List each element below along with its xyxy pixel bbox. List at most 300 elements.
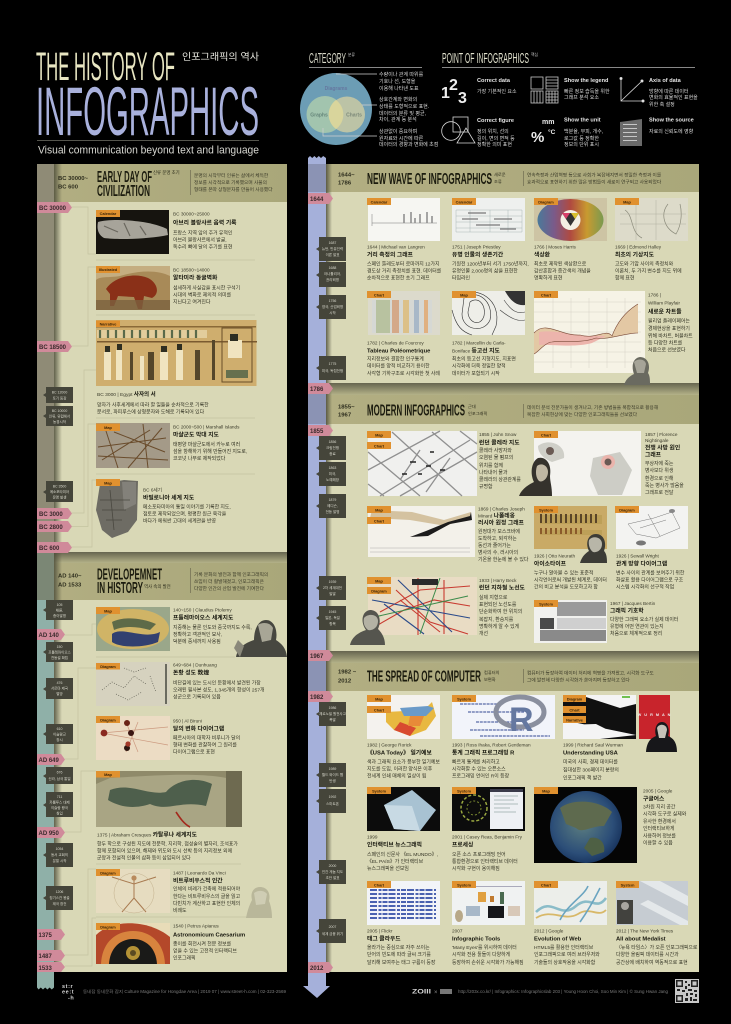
history notes: 676 — [57, 770, 62, 774]
image: john snow map: Map — [375, 432, 384, 438]
text: playfair: 새로운 차트들 — [648, 308, 682, 316]
title: THE HISTORY OF — [36, 45, 175, 89]
heading: early day of civilization — [58, 169, 273, 200]
text: all about medalist: 다양한 올림픽 데이터를 시간과 — [616, 951, 679, 958]
image: ptolemy world map — [96, 607, 170, 651]
text: all about medalist: 〈뉴욕 타임스〉가 오픈 인포그래픽으로 — [616, 944, 698, 951]
history notes: 1206 — [56, 890, 63, 894]
panel: point of infographics: 정의 위치, 선의 — [477, 128, 509, 135]
history notes: 인류, 유럽에서 — [49, 414, 70, 418]
history notes: 체르노빌 원전사고 — [319, 711, 347, 716]
text: flickr — [367, 928, 436, 966]
text: catalan atlas: 함께 포함되어 있으며, 해제와 위도와 도시 선박 등의 지리정보 외에 — [97, 848, 232, 854]
text: babylonian map: 바빌로니아 세계 지도 — [143, 494, 195, 502]
image: usa today weather — [367, 695, 440, 739]
text: playfair: 처음으로 선보였다 — [648, 346, 686, 354]
history notes: 에디슨, — [327, 503, 338, 508]
history notes — [316, 237, 347, 943]
panel: point of infographics: 백분율, 부피, 개수, — [564, 128, 603, 135]
icon: units: % — [531, 129, 544, 146]
text: flickr: 2005 | Flickr — [367, 928, 393, 934]
text: john snow: 나타내어 물과 — [479, 469, 508, 476]
image: calendar bone: Calendar — [100, 211, 117, 216]
image: bison cave painting — [96, 266, 170, 310]
heading: modern infographics: 복잡한 사회현상에 맞는 다양한 인포그래픽들을 선보였다 — [527, 411, 638, 418]
text: marshall islands — [173, 424, 247, 462]
text: google earth: 인터랙티브하게 — [643, 825, 674, 832]
text: dunhuang: 성군으로 기록되어 있음 — [173, 694, 221, 700]
history notes: 토기 등장 — [53, 396, 67, 400]
text: google earth: 유사한 환경에서 — [643, 818, 676, 825]
image: john snow map: Chart — [374, 444, 385, 448]
text: harry beck — [479, 578, 526, 637]
image: wright diagram — [615, 506, 688, 549]
image: minard map — [367, 506, 475, 557]
image: halley map — [615, 198, 688, 241]
icon: legend grids — [531, 77, 558, 103]
text: catalan atlas: 군왕과 전설적 인물의 삽화 등이 삽입되어 있다 — [97, 854, 191, 862]
text: calendar bone: 아브리 블랑샤르에서 발굴, — [173, 236, 227, 244]
panel: point of infographics: 길이, 면의 면적 등 — [477, 135, 515, 142]
text: bertin: 유형에 어떤 연관이 있는지 — [610, 623, 664, 630]
history notes: 초안 발표 — [326, 875, 340, 880]
text: nightingale: 그래프 — [645, 450, 662, 458]
text: all about medalist: 공간상에 배치하여 역동적으로 표현 — [616, 959, 688, 966]
history notes: 2007 — [329, 925, 336, 929]
text: langren — [367, 244, 442, 282]
image: infographic tools: System — [457, 882, 471, 888]
text: halley: 고도와 기압 사이의 측정치와 — [615, 260, 674, 268]
text: wright — [616, 554, 685, 590]
history notes: 메소포타미아 — [50, 489, 70, 494]
text: dunhuang: 649~684 | Dunhuang — [173, 662, 217, 668]
heading: the spread of computer: 2012 — [338, 678, 352, 684]
text: dunhuang — [173, 662, 265, 700]
history notes: 1879 — [329, 498, 336, 502]
history notes: 711 — [57, 795, 62, 799]
history notes: 미국, 독립전쟁 — [322, 368, 343, 373]
text: minard: 1869 | Charles Joseph — [478, 506, 525, 512]
history notes: 일본, 독일 — [325, 615, 340, 620]
panel: point of infographics: POINT OF INFOGRAPHICS — [442, 50, 529, 67]
text: nightingale: 환경으로 인해 — [645, 475, 673, 482]
text: john snow — [479, 432, 521, 490]
text: ptolemy: 지중해는 물론 인도와 중국까지도 수록, — [173, 624, 252, 631]
timeline flags — [308, 193, 333, 973]
text: vitruvian: 한다는 비트루비우스의 글을 읽고 — [173, 893, 241, 900]
text: playfair: William Playfair — [648, 300, 680, 306]
panel: point of infographics: 자료의 신뢰도에 영향 — [649, 128, 694, 135]
image: astronomicum caesarium: Diagram — [100, 924, 116, 930]
history notes: 크림전쟁 — [326, 445, 339, 450]
text: calendar bone: BC 30000~25000 — [173, 212, 210, 216]
title — [36, 45, 259, 156]
heading: modern infographics: 데이터 분석 전문가들이 생겨나고, 기존 방법들을 복합적으로 활용해 — [527, 404, 658, 411]
timeline flags: AD 950 — [38, 831, 60, 837]
icon: nightingale portrait — [519, 458, 552, 496]
history notes: 신라, 삼국 통일 — [48, 776, 71, 781]
text: fourcroy: 지리정보와 결합한 인구통계 — [367, 356, 424, 362]
panel: point of infographics: Show the unit — [564, 118, 601, 124]
timeline flags: BC 30000 — [39, 206, 67, 212]
text: harry beck: 개선 — [479, 630, 488, 637]
text: interactive news: 인터랙티브 뉴스그래픽 — [367, 840, 422, 848]
panel: point of infographics: 방향에 따른 데이터 — [649, 88, 689, 95]
text: halley: 함께 표현 — [615, 274, 634, 282]
panel: point of infographics: 가장 기본적인 요소 — [477, 88, 517, 95]
text: priestley: 1751 | Joseph Priestley — [452, 244, 501, 250]
history notes: 종이발명 — [53, 613, 66, 618]
text: egypt: 망자가 사후세계에서 따라 할 일들을 순차적으로 기록한 — [97, 402, 209, 408]
image: vitruvian man — [96, 869, 170, 913]
text: astronomicum: 인포그래픽 — [173, 954, 196, 962]
text: minard: 원정대가 모스크바에 — [478, 528, 520, 535]
icon: leonardo portrait — [246, 887, 272, 918]
image: astronomicum caesarium — [96, 923, 170, 964]
text: contour — [452, 340, 516, 377]
logo: street-h: ee:t — [62, 990, 74, 996]
heading: development in history: AD 1533 — [58, 582, 82, 588]
icon: units: mm — [542, 119, 554, 126]
image: minard map: Chart — [374, 518, 385, 524]
panel: category: 상태를 도형적으로 표현. — [379, 103, 429, 110]
image: calendar bone — [96, 210, 169, 254]
text: INFOGRAPHICS — [36, 73, 259, 150]
text: interactive news: 《EL PAÍS》가 인터랙티브 — [367, 858, 424, 865]
timeline flags: 1375 — [38, 933, 53, 939]
text: harry beck: 명확하게 알 수 있게 — [479, 623, 519, 630]
text: minard — [478, 506, 529, 563]
timeline flags: AD 140 — [38, 633, 60, 639]
icon: figures — [442, 117, 475, 143]
text: google earth: 사용하여 정보를 — [643, 832, 676, 840]
heading: new wave of infographics: 새로운 — [494, 171, 506, 178]
image: infographic tools — [452, 881, 525, 925]
history notes: 시작 — [329, 310, 336, 315]
text: nightingale: Nightingale — [645, 438, 669, 443]
text: infographic tools: 2007 — [452, 928, 463, 934]
text: evolution of web: 기술들의 상호작용을 시각화함 — [534, 959, 596, 966]
panel: category: 분류 — [348, 52, 355, 57]
heading: development in history: IN HISTORY — [97, 580, 143, 597]
text: flickr: 단어의 빈도에 따라 글씨 크기를 — [367, 951, 431, 958]
text: google earth: 3차원 지리 공간 — [643, 804, 676, 810]
heading: new wave of infographics: 조류 — [494, 179, 502, 185]
image: isotype — [534, 506, 607, 549]
text: john snow: 1855 | John Snow — [479, 432, 517, 437]
text: calendar bone: 프랑스 지역 앞의 주거 유적인 — [173, 230, 232, 236]
text: neurath: 1926 | Otto Neurath — [534, 554, 575, 558]
heading: development in history: 다양한 인간의 산업 발전에 기여한다 — [194, 585, 265, 592]
image: london underground map: Diagram — [371, 588, 387, 594]
heading: new wave of infographics: 연속측정과 산업혁명 등으로 사회가 복잡해지면서 정밀한 측정과 이를 — [527, 172, 662, 178]
timeline flags: 1533 — [38, 966, 53, 972]
text: egypt: 문서로, 파피루스에 상형문자와 도해로 기록되어 있다 — [97, 408, 205, 416]
text: fourcroy: 데이터를 양적 비교하기 용이한 — [367, 362, 430, 370]
history notes: 권리혁명 — [326, 277, 339, 282]
text: nightingale: 죽는 병사가 많음을 — [645, 482, 684, 489]
text: contour: 1782 | Marcellin du Carla- — [452, 340, 506, 346]
image: nightingale rose: Chart — [541, 432, 552, 438]
image: google earth — [534, 787, 637, 863]
text: al biruni: 형태 변화를 관찰하여 그 원리를 — [173, 742, 237, 748]
heading: new wave of infographics: 효과적으로 표현하기 위한 많은 방법들이 새로이 연구되고 사용되었다 — [527, 178, 662, 186]
text: infographic tools: 'Many Eyes'를 위시하여 데이터 — [452, 944, 517, 951]
history notes: 1945 — [329, 610, 336, 614]
text: marshall islands: 섬을 항해하기 위해 만들어진 지도로, — [173, 448, 247, 455]
text: babylonian map — [143, 486, 231, 524]
image: r language: System — [457, 696, 471, 702]
panel: category: 원자료와 시간에 따른 — [379, 135, 424, 142]
heading: development in history: DEVELOPEMNET — [97, 566, 162, 584]
text: interactive news: 1999 — [367, 834, 378, 840]
text: harry beck: 단순화하여 한 위치의 — [479, 608, 522, 615]
image: london underground map: Map — [375, 578, 384, 584]
timeline flags: 1487 — [38, 954, 53, 960]
panel background — [326, 164, 699, 972]
image: interactive news graphic: System — [372, 788, 386, 794]
panel: point of infographics: 위한 축 설정 — [649, 101, 675, 108]
history notes: 서로마 제국 — [51, 686, 69, 690]
panel: category: 기호나 선, 도형을 — [379, 78, 416, 85]
text: john snow: 위치를 함께 — [479, 462, 503, 469]
text: processing: 통합환경으로 인터랙티브 데이터 — [452, 858, 518, 865]
text: priestley: 유명 인물의 생존기간 — [452, 250, 504, 258]
text: ptolemy: 프톨레마이오스 세계지도 — [173, 614, 234, 622]
text: wurman: Understanding USA — [563, 750, 619, 756]
icon: ptolemy portrait — [234, 620, 287, 657]
image: google earth: Map — [542, 788, 551, 794]
text: al biruni: 달의 변화 다이어그램 — [173, 724, 224, 732]
history notes: 창시 — [56, 737, 63, 742]
timeline arrow — [303, 156, 330, 998]
text: wright: 관계 방향 다이어그램 — [616, 560, 667, 568]
history notes: BC 12000 — [52, 390, 67, 394]
text: r language: 프로그래밍 언어인 R이 등장 — [452, 772, 510, 780]
text: bison cave painting: 시대의 벽화로 제의적 의미를 — [173, 292, 232, 298]
icon: units — [531, 119, 556, 146]
text: harry beck: 1933 | Harry Beck — [479, 578, 517, 583]
qr code — [675, 979, 699, 1003]
text: all about medalist — [616, 928, 698, 966]
text: marshall islands: 태평양 마샬군도에서 카누로 여러 — [173, 441, 240, 448]
text: langren: 스페인 톨레도부터 로마까지 12가지 — [367, 260, 440, 268]
image: evolution of web — [534, 881, 607, 925]
text: halley: 최초의 기상지도 — [615, 250, 655, 258]
text: neurath: 누구나 알아볼 수 있는 표준적 — [534, 570, 593, 576]
text: al biruni: 페르시아의 대학자 비루니가 달의 — [173, 734, 240, 742]
image: catalan atlas: Map — [104, 772, 113, 777]
image: nightingale rose — [534, 431, 641, 496]
heading: new wave of infographics: NEW WAVE OF INFOGRAPHICS — [367, 171, 492, 188]
text: usa today: 1982 | George Rorick — [367, 742, 412, 748]
text: bertin: 그래픽 기호학 — [610, 606, 644, 614]
heading: early day of civilization: EARLY DAY OF — [97, 169, 152, 186]
panel: point of infographics: 변화의 효율적인 표현을 — [649, 94, 698, 101]
text: neurath: 아이소타이프 — [534, 560, 567, 568]
text: flickr: 태그 클라우드 — [367, 934, 401, 942]
text: minard: 도착하고, 퇴각하는 — [478, 535, 517, 542]
text: contour: 데이터가 포함되기 시작 — [452, 370, 500, 377]
panel: point of infographics: Correct figure — [477, 118, 514, 124]
text: john snow: 콜레라 사망자와 — [479, 447, 512, 454]
timeline flags: AD 649 — [38, 758, 60, 764]
image: book of the dead papyrus: Narrative — [100, 322, 117, 326]
text: infographic tools: 시각화 전용 툴들이 다양하게 — [452, 951, 510, 958]
text: all about medalist: 2012 | The New York Times — [616, 928, 674, 934]
text: processing — [452, 834, 523, 872]
text: r language: 통계 그래픽 프로그래밍 R — [452, 748, 515, 756]
text: catalan atlas: 1375 | Abraham Cresques 카탈루냐 세계지도 — [97, 830, 198, 838]
image: bertin semiology — [534, 600, 607, 643]
text: halley — [615, 244, 682, 282]
text: usa today: 《USA Today》 일기예보 — [367, 748, 432, 756]
icon: numbers 123: 1 — [441, 85, 450, 102]
text: ptolemy: 140~150 | Claudius Ptolemy — [173, 608, 232, 612]
text: google earth: 2005 | Google — [643, 788, 673, 794]
text: wurman: 미국의 사회, 경제 데이터를 — [563, 758, 618, 766]
image: fourcroy tableau — [367, 291, 440, 335]
history notes: 노예해방 — [326, 477, 340, 482]
venn diagram: Graphs — [310, 112, 328, 118]
text: usa today: 색과 그래픽 요소가 풍부한 일기예보 — [367, 758, 440, 766]
image: priestley chart: Calendar — [456, 200, 473, 204]
panel: right column — [303, 156, 699, 998]
text: vitruvian: 다빈치가 계산하고 표현한 인체의 — [173, 900, 240, 907]
text: playfair: 1786 | — [648, 292, 661, 298]
text: harris: 명확하게 표현 — [534, 274, 562, 282]
text: dunhuang: 비단길에 있는 도시인 둔황에서 발견된 가장 — [173, 680, 261, 686]
text: neurath — [534, 554, 607, 590]
heading: new wave of infographics: 1786 — [338, 180, 352, 186]
panel: category — [300, 50, 438, 148]
history notes: 1992 — [329, 795, 336, 799]
text: harris: 1766 | Moses Harris — [534, 244, 577, 250]
text: infographic tools: Infographic Tools — [452, 936, 500, 942]
panel: point of infographics: Show the source — [649, 118, 694, 124]
text: vitruvian: 비례도 — [173, 907, 187, 914]
text: infographic tools — [452, 928, 524, 966]
history notes: 칭기스칸 몽골 — [49, 895, 70, 900]
history notes: 멸망 — [56, 691, 63, 696]
text: contour: 시각화에 더욱 정밀한 양적 — [452, 362, 506, 370]
image: contour map: Map — [460, 292, 469, 298]
history notes: 1687 — [329, 241, 336, 245]
image: catalan atlas — [96, 771, 242, 827]
history notes: 150 — [57, 645, 62, 649]
history notes: BC 3500 — [53, 484, 66, 488]
history notes: 침입 — [56, 810, 63, 816]
text: catalan atlas — [97, 830, 238, 862]
panel: point of infographics: 핵심 — [531, 52, 538, 57]
text: minard: Minard 나폴레옹 — [478, 512, 516, 520]
timeline flags: 2012 — [310, 966, 324, 972]
text: evolution of web — [534, 928, 600, 966]
heading: modern infographics: 근대 — [468, 403, 476, 410]
image: fourcroy tableau: Chart — [374, 292, 385, 298]
text: astronomicum: 얻을 수 있는 고전적 인터랙티브 — [173, 948, 237, 954]
heading: development in history: 쓰임이 더 활발해졌고, 인포그래픽은 — [194, 578, 265, 585]
image: babylonian map — [96, 479, 138, 538]
history notes: 스마트폰 — [326, 801, 340, 806]
image: usa today weather: Map — [375, 696, 384, 702]
panel: point of infographics: 정확한 의미 표현 — [477, 141, 512, 148]
timeline flags: 1982 — [310, 695, 324, 701]
image: bertin semiology: System — [539, 602, 553, 606]
text: minard: 기온을 한눈에 볼 수 있다 — [478, 556, 529, 563]
image: al biruni moon diagram — [96, 716, 170, 760]
image: minard map: Map — [375, 508, 384, 512]
history notes: 105 — [57, 603, 62, 607]
heading: early day of civilization: 형태를 본따 상형문자를 만들어 사용했다 — [194, 186, 273, 193]
image: al biruni moon diagram: Diagram — [100, 718, 116, 722]
timeline flags: 1644 — [310, 197, 324, 203]
panel: category: 데이터의 분류 및 평균, — [379, 110, 426, 117]
image: vitruvian man: Diagram — [100, 870, 116, 876]
title: Visual communication beyond text and language — [38, 144, 259, 156]
history notes: 영국, 산업혁명 — [322, 304, 343, 309]
text: google earth: 구글어스 — [643, 794, 665, 802]
text: processing: 시각화 구현이 용이해짐 — [452, 865, 500, 872]
history notes: 610 — [57, 727, 62, 731]
text: calendar bone — [173, 212, 237, 250]
panel background — [37, 164, 287, 990]
history notes: 전등 발명 — [326, 509, 339, 514]
text: r language — [452, 742, 531, 780]
icon: wurman portrait: W U R M A N — [638, 713, 671, 717]
text: bison cave painting — [173, 268, 240, 306]
logo: street-h — [62, 984, 74, 1002]
image: langren graph: Calendar — [371, 200, 388, 204]
text: ptolemy: 덕분에 중세까지 사용됨 — [173, 638, 221, 645]
text: bison cave painting: 알타미라 동굴벽화 — [173, 274, 218, 282]
text: egypt — [97, 390, 209, 416]
text: r language: 1993 | Ross Ihaka, Robert Gentleman — [452, 742, 531, 748]
text: fourcroy: Tableau Poléometrique — [367, 348, 431, 354]
text: langren: 경도상 거리 측정치를 표현. 데이터를 — [367, 268, 442, 274]
history notes: 1939 — [329, 580, 336, 584]
history notes: 이슬람교 — [53, 732, 67, 736]
text: priestley: 타임라인 — [452, 274, 470, 282]
text: fourcroy: 1782 | Charles de Fourcroy — [367, 340, 424, 346]
text: marshall islands: 코코넛 나무로 제작되었다 — [173, 455, 226, 462]
heading: early day of civilization: BC 600 — [58, 184, 79, 190]
text: processing: 오픈 소스 프로그래밍 언어 — [452, 851, 506, 858]
text: minard: 병사의 수, 러시아의 — [478, 549, 518, 556]
panel: point of infographics: Axis of data — [649, 78, 682, 84]
text: john snow: 규명함 — [479, 483, 493, 490]
text: marshall islands: 마샬군도 막대 지도 — [173, 430, 220, 438]
heading: new wave of infographics: 1644~ — [338, 172, 355, 178]
image: all about medalist: System — [621, 882, 635, 888]
history notes: 1863 — [329, 466, 336, 470]
text: google earth: 시각화 도구로 실제와 — [643, 810, 687, 818]
text: al biruni — [173, 718, 240, 756]
image: dunhuang star chart: Diagram — [100, 664, 116, 669]
image: marshall islands stick map — [96, 423, 170, 468]
image: playfair chart: Chart — [541, 292, 552, 298]
text: vitruvian: 인체의 비례가 건축에 적용되어야 — [173, 886, 241, 892]
text: wright: 화살표 활용 다이어그램으로 구조 — [616, 576, 684, 584]
text: wurman — [563, 742, 623, 782]
icon: numbers 123: 2 — [449, 77, 458, 94]
image: understanding usa: Diagram — [567, 696, 583, 702]
panel: left column — [37, 164, 287, 990]
venn diagram: Diagrams — [325, 86, 348, 92]
heading: development in history: AD 140~ — [58, 574, 82, 580]
text: vitruvian: 1487 | Leonardo Da Vinci — [173, 870, 226, 876]
text: interactive news — [367, 834, 438, 872]
